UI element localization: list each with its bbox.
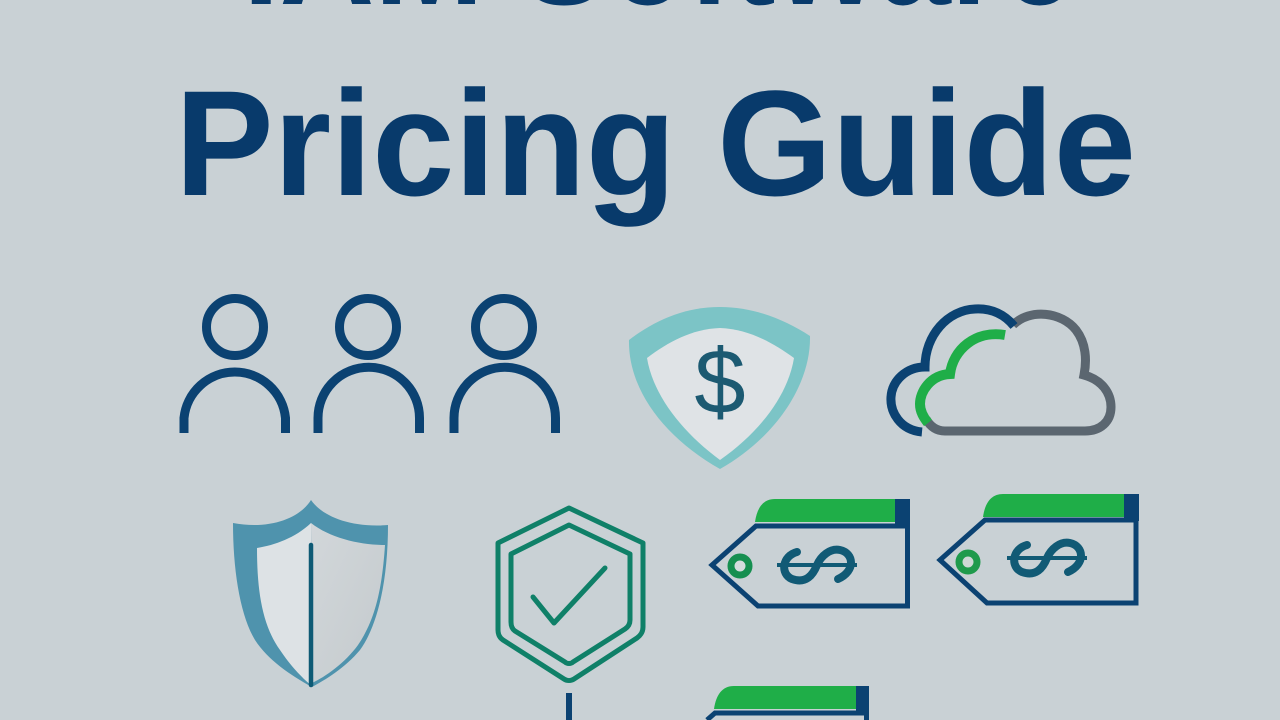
icon: cloud xyxy=(891,309,1111,432)
user 1 xyxy=(184,298,286,433)
user 3 xyxy=(454,298,556,433)
icon: hexagon check badge xyxy=(498,508,643,680)
icon: price tag 1 xyxy=(712,499,910,606)
icon: security shield xyxy=(233,500,388,687)
icon: three users xyxy=(184,298,556,433)
user 2 xyxy=(318,298,420,433)
icon: price tag 2 xyxy=(940,494,1139,603)
title line 2: Pricing Guide xyxy=(175,59,1136,227)
icon: shield with dollar sign: $ xyxy=(694,331,746,433)
connector line xyxy=(566,693,572,720)
icon: price tag 3 (cropped at bottom edge) xyxy=(707,686,869,720)
icon: shield with dollar sign xyxy=(629,307,810,469)
